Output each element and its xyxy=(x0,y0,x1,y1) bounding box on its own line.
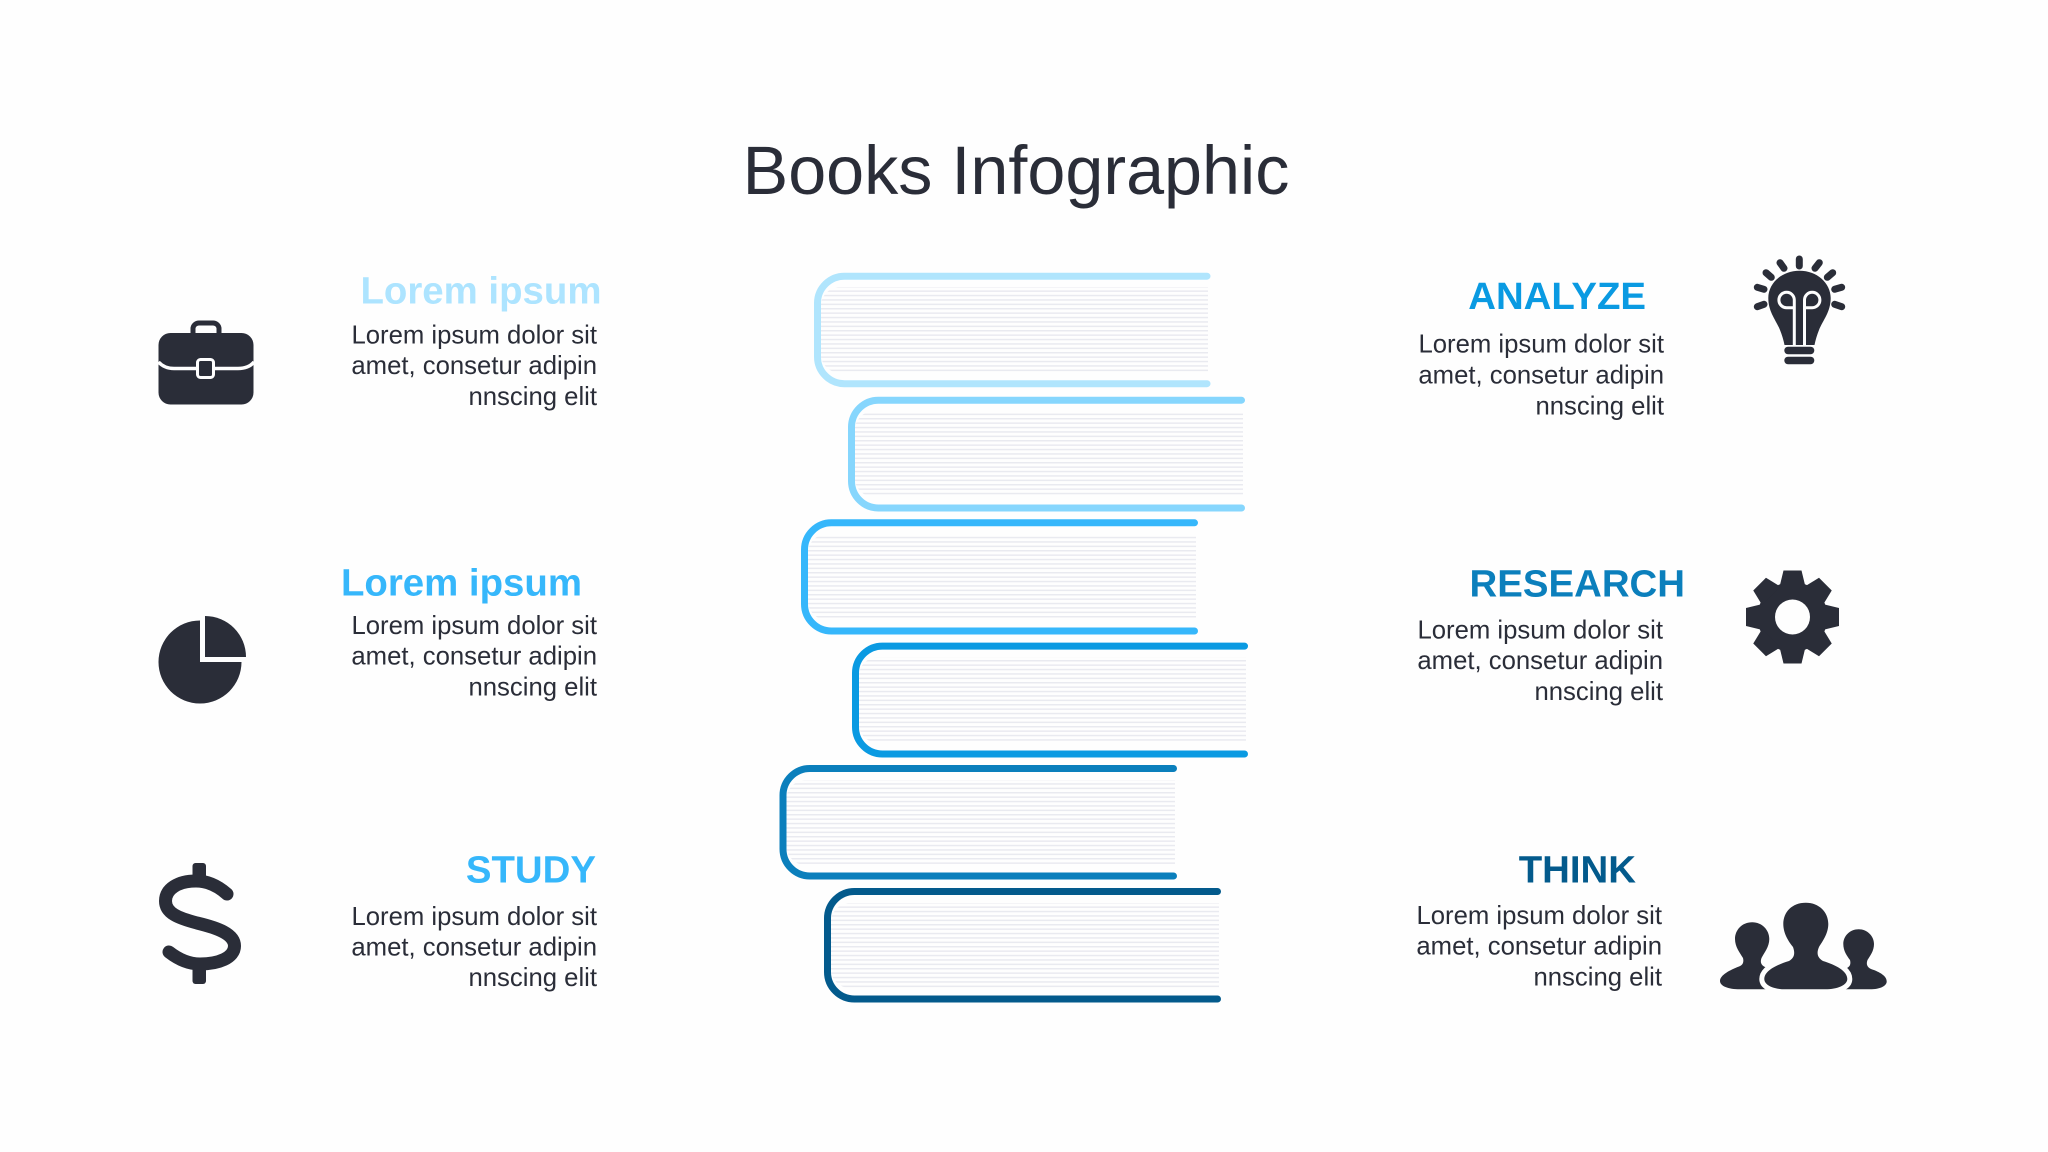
panel: bottom left text xyxy=(351,848,597,992)
book 2 xyxy=(852,400,1243,508)
icon: briefcase xyxy=(158,323,254,404)
panel: middle right text xyxy=(1417,562,1685,706)
body text: amet, consetur adipin xyxy=(1416,933,1662,961)
book 1 xyxy=(817,276,1208,384)
title: Books Infographic xyxy=(743,133,1289,209)
heading: Lorem ipsum xyxy=(360,270,602,313)
body text: amet, consetur adipin xyxy=(1418,362,1664,390)
body text: Lorem ipsum dolor sit xyxy=(351,321,597,349)
body text: nnscing elit xyxy=(468,673,597,701)
icon: light bulb xyxy=(1757,259,1842,364)
heading: ANALYZE xyxy=(1468,275,1646,318)
book 3 xyxy=(804,523,1196,631)
book stack xyxy=(783,276,1246,999)
panel: middle left text xyxy=(341,562,597,701)
body text: Lorem ipsum dolor sit xyxy=(351,903,597,931)
body text: nnscing elit xyxy=(468,964,597,992)
body text: nnscing elit xyxy=(1533,964,1662,992)
icon: gear xyxy=(1746,570,1839,664)
body text: amet, consetur adipin xyxy=(351,934,597,962)
heading: Lorem ipsum xyxy=(341,562,582,605)
body text: Lorem ipsum dolor sit xyxy=(1416,902,1662,930)
body text: amet, consetur adipin xyxy=(351,643,597,671)
body text: amet, consetur adipin xyxy=(1417,647,1663,675)
panel: top right text xyxy=(1418,275,1664,420)
icon: dollar sign xyxy=(166,863,234,984)
body text: nnscing elit xyxy=(1535,392,1664,420)
heading: RESEARCH xyxy=(1470,562,1685,605)
body text: amet, consetur adipin xyxy=(351,352,597,380)
icon: pie chart xyxy=(158,616,246,704)
book 6 xyxy=(827,891,1219,999)
book 5 xyxy=(783,768,1175,876)
panel: top left text xyxy=(351,270,602,411)
panel: bottom right text xyxy=(1416,848,1662,992)
body text: Lorem ipsum dolor sit xyxy=(1418,331,1664,359)
icon: people xyxy=(1720,903,1887,989)
body text: nnscing elit xyxy=(468,383,597,411)
heading: THINK xyxy=(1519,848,1636,891)
body text: Lorem ipsum dolor sit xyxy=(1417,616,1663,644)
body text: nnscing elit xyxy=(1534,678,1663,706)
book 4 xyxy=(856,646,1246,754)
body text: Lorem ipsum dolor sit xyxy=(351,612,597,640)
heading: STUDY xyxy=(466,848,596,891)
